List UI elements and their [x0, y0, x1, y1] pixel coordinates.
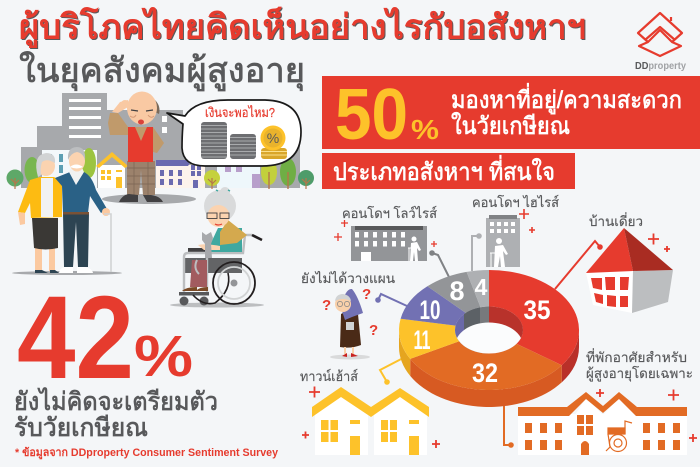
slice values: 32: [472, 358, 498, 388]
question marks: ?: [369, 322, 378, 339]
illustration: worried old man: [102, 92, 196, 204]
slice values: 35: [524, 295, 550, 325]
slice 35: [489, 270, 579, 365]
panel: property types heading: ประเภทอสังหาฯ ที่สนใจ: [333, 155, 555, 186]
coin stack short: [230, 134, 256, 159]
label: senior housing: ผู้สูงอายุโดยเฉพาะ: [586, 365, 693, 382]
question marks: ?: [362, 286, 371, 303]
logo: DDproperty: DDproperty: [635, 60, 686, 72]
grandmother body: [182, 187, 247, 291]
question marks: ?: [322, 297, 331, 314]
icon: senior residence: [518, 392, 687, 455]
wheelchair frame: [179, 235, 262, 306]
logo: DDproperty: [635, 13, 686, 72]
slice values: 10: [420, 295, 440, 325]
slice 32: [410, 341, 562, 390]
chart side walls: [399, 330, 579, 407]
icon: townhouses: [312, 387, 429, 455]
slice values: 4: [475, 274, 488, 300]
big stat: 42%: 42: [17, 272, 134, 404]
text: not preparing: [14, 387, 218, 442]
panel: 50 percent: ในวัยเกษียณ: [451, 112, 570, 140]
question marks: [322, 286, 378, 339]
label: senior housing: ที่พักอาศัยสำหรับ: [586, 348, 687, 365]
label: townhouse: ทาวน์เฮ้าส์: [300, 368, 358, 384]
slice values: 8: [449, 276, 465, 306]
illustration: elderly couple: [12, 147, 122, 275]
label: detached house: บ้านเดี่ยว: [589, 212, 643, 229]
cane: [104, 214, 111, 272]
panel: 50 percent: %: [411, 114, 439, 145]
wheelchair symbol: [606, 421, 632, 452]
raised arm: [112, 100, 128, 113]
woman: [18, 153, 62, 273]
panel: 50 percent: 50: [335, 75, 408, 155]
yellow house: [96, 152, 128, 188]
plus signs: [302, 209, 697, 448]
slice 4: [467, 270, 489, 307]
label: high rise: คอนโดฯ ไฮไรส์: [472, 194, 559, 210]
leader lines: [375, 233, 603, 448]
donut hole: [455, 306, 523, 354]
illustration: city skyline: [6, 93, 314, 189]
text: not preparing: ยังไม่คิดจะเตรียมตัว: [14, 387, 218, 416]
cat: [202, 232, 213, 258]
panel: 50 percent: [322, 75, 700, 155]
icon: high rise condo: [486, 215, 520, 267]
slice 10: [401, 286, 466, 326]
title: line one: ผู้บริโภคไทยคิดเห็นอย่างไรกับอสังหาฯ: [20, 6, 587, 50]
large wheel: [193, 262, 255, 304]
illustration: grandmother in wheelchair: [170, 187, 264, 308]
light blue building: [217, 165, 260, 188]
icon: low rise condo: [351, 226, 427, 261]
icon: detached house: [586, 228, 673, 313]
big stat: 42%: %: [134, 324, 193, 389]
icon: confused elderly woman: [330, 289, 370, 360]
slice 8: [427, 272, 480, 313]
coin stack tall: [201, 122, 227, 159]
panel: 50 percent: มองหาที่อยู่/ความสะดวก: [451, 83, 682, 115]
donut chart: [399, 270, 579, 407]
label: low rise: คอนโดฯ โลว์ไรส์: [342, 205, 437, 221]
man: [55, 147, 110, 273]
text: not preparing: รับวัยเกษียณ: [14, 414, 148, 442]
tree row right: [204, 158, 314, 189]
speech bubble: money worry: [167, 100, 301, 166]
purple roof building: [156, 160, 205, 188]
speech bubble: money worry: เงินจะพอไหม?: [205, 105, 275, 120]
title: line one: ผู้บริโภคไทยคิดเห็นอย่างไรกับอสังหาฯ: [19, 6, 586, 48]
gold coins with percent: %: [267, 130, 279, 146]
title: line two: ในยุคสังคมผู้สูงอายุ: [19, 51, 305, 91]
tree row left: [6, 148, 96, 189]
slice 11: [399, 319, 459, 359]
label: not planned: ยังไม่ได้วางแผน: [301, 271, 395, 286]
slice values: 11: [414, 325, 430, 355]
slice values: [414, 274, 550, 388]
footnote: source: * ข้อมูลจาก DDproperty Consumer Sentiment Survey: [15, 446, 279, 460]
label: senior housing: [586, 348, 693, 382]
